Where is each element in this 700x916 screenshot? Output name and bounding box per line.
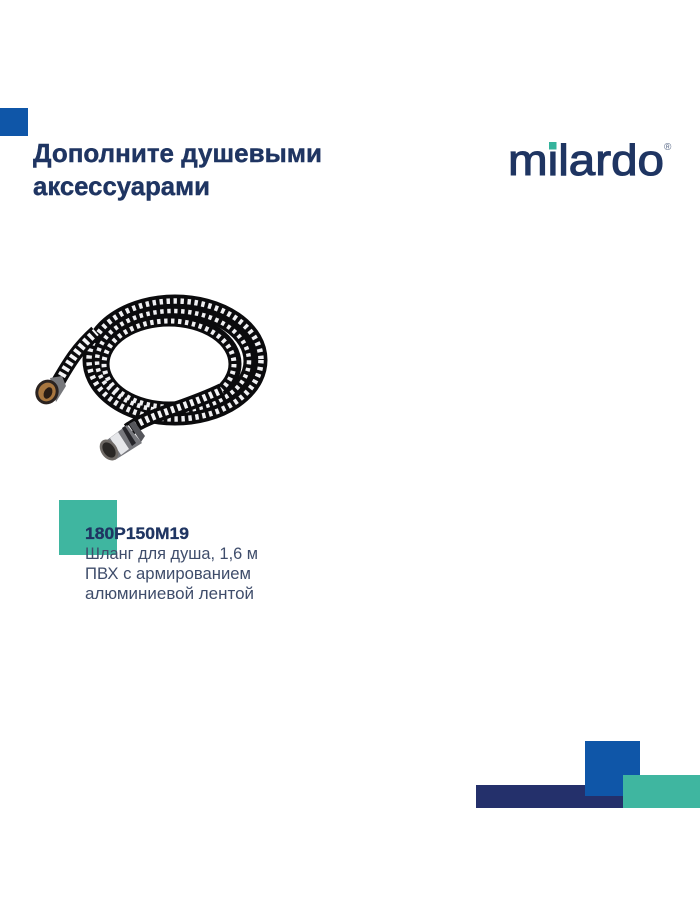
accent square: top-left blue bbox=[0, 108, 28, 136]
description line 2: ПВХ с армированием bbox=[85, 565, 251, 583]
title: аксессуарами bbox=[33, 171, 210, 201]
product image: shower hose bbox=[31, 301, 261, 464]
product description bbox=[85, 525, 258, 603]
logo: milardo: ® bbox=[664, 142, 672, 153]
hose tail to left fitting bbox=[58, 332, 96, 382]
hose tail to right fitting bbox=[128, 390, 222, 430]
decorative block group: bottom right bbox=[476, 741, 700, 808]
product code: 180P150M19 bbox=[85, 525, 189, 543]
right chrome fitting bbox=[96, 421, 145, 464]
accent square: teal behind product code bbox=[59, 500, 117, 555]
description line 3: алюминиевой лентой bbox=[85, 585, 254, 603]
logo: milardo: milardo bbox=[508, 136, 664, 185]
title bbox=[33, 138, 322, 201]
left brass fitting bbox=[31, 376, 66, 408]
description line 1: Шланг для душа, 1,6 м bbox=[85, 545, 258, 563]
hose coils bbox=[89, 301, 261, 419]
title: Дополните душевыми bbox=[33, 138, 322, 168]
